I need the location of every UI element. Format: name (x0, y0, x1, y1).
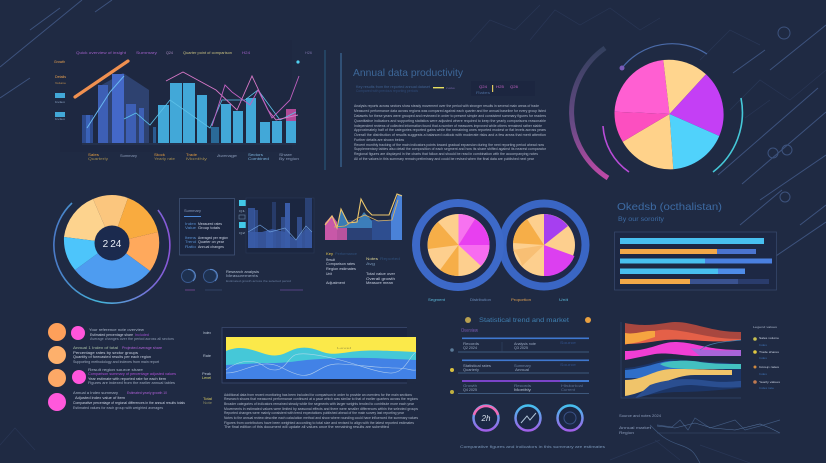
x-axis captions: Summary (120, 154, 138, 158)
x-axis captions: Monthly (186, 157, 208, 161)
panel: stacked area chart: Level (337, 346, 352, 350)
panel: mini blue bar chart: Q1 (239, 209, 245, 213)
list text: Year estimate with reported rate for each item (88, 377, 166, 381)
row text: Growth (463, 384, 477, 388)
list text: Estimated values for each group with weighted averages (73, 406, 163, 410)
right ring (502, 204, 586, 286)
row text (463, 341, 583, 392)
marker dot (296, 60, 300, 64)
paragraph text: Quantitative indicators and supporting statistics were adjusted where required to keep the yearly comparisons reasonable (354, 119, 546, 123)
paragraph text (224, 393, 418, 429)
paragraph text: The final edition of this document will update all values once the remaining results are submitted (224, 425, 389, 429)
x-axis captions: Sales (88, 153, 100, 157)
outer gradient arc (572, 48, 608, 178)
paragraph text: Notes to the annual review describe each calculation method and show where rounding could have influenced the summary values (224, 416, 418, 420)
pink tags: H25 (496, 85, 504, 89)
left legend: Volume (55, 81, 66, 85)
pie slices (614, 60, 670, 114)
flow legend: Trade shares (759, 350, 780, 354)
sub heading: note (446, 86, 456, 90)
pink tags: Q26 (510, 85, 518, 89)
panel: horizontal bars (614, 201, 776, 290)
twin pie captions: Proportion (511, 298, 531, 302)
chart heading labels: H24 (242, 51, 250, 55)
flow legend: Sales volume (759, 336, 779, 340)
left legend: Index (55, 117, 66, 121)
flow legend: Yearly values (759, 380, 781, 384)
list text (73, 328, 185, 410)
panel: mountain line chart (325, 194, 402, 285)
left legend: Details (55, 75, 66, 79)
flow legend: Group rates (759, 365, 780, 369)
row text: Historical (561, 384, 583, 388)
row text: Monthly (514, 388, 532, 392)
side labels: Total (203, 397, 212, 401)
list text: Result region source share (88, 368, 143, 372)
row text: Quarterly (463, 368, 479, 372)
paragraph text: Broader categories of indicators remained steady while the segments with larger weights tended to contribute more each year (224, 402, 415, 406)
chart line overlays (226, 352, 416, 375)
panel: progress list: Overview (461, 328, 478, 334)
flow legend: Legend values (753, 325, 778, 329)
bars: cyan group (158, 83, 296, 143)
panel: small legend box: Measured rates (198, 222, 222, 226)
donut slices (64, 199, 112, 243)
x-axis captions: Average (217, 154, 237, 158)
paragraph text: Measured performance data across regions was compared against each quarter and the annual baseline for every group listed (354, 109, 546, 113)
x-axis captions: Sectors (248, 153, 264, 157)
orange trend line (75, 61, 128, 97)
list text: Figures are indexed from the earlier annual tables (88, 381, 175, 385)
heading: Statistical trend and market (479, 317, 569, 324)
row text: Records (514, 384, 532, 388)
panel: horizontal bars: By our sorority (618, 216, 665, 223)
row text: Source (560, 363, 576, 367)
pink trend lines (166, 72, 298, 120)
sub heading: Key results from the reported annual dataset (356, 85, 430, 89)
heading: Okedsb (octhalistan) (617, 201, 722, 213)
paragraph text: All of the values in this summary remain preliminary and could be revised when the final data are published next year (354, 157, 535, 161)
paragraph text: Approximately half of the categories reported gains while the remaining ones reported modest or flat levels across years (354, 128, 546, 132)
row text: Current (561, 388, 575, 392)
twin pie captions: Unit (559, 298, 568, 302)
left legend: Growth (54, 60, 65, 64)
panel: flow chart (621, 322, 781, 398)
list text: Annual 1 Index of total (73, 346, 118, 350)
row text: Q4 2025 (463, 388, 477, 392)
side labels: Note (203, 401, 212, 405)
right axis (324, 50, 326, 170)
panel: dials and caption: Research analysis (226, 270, 259, 274)
paragraph text: Recent monthly tracking of the main indicators points toward gradual expansion during the next reporting period ahead now (354, 143, 544, 147)
left legend: Index (55, 100, 66, 104)
chart heading labels: Q24 (166, 51, 173, 55)
panel: bottom-right line chart: Source and notes 2024 (619, 414, 661, 418)
flow legend: Index (759, 343, 768, 347)
right pie (513, 214, 575, 276)
chart heading labels: Quick overview of insight (76, 51, 126, 55)
panel: small legend box (180, 198, 234, 255)
pink tags: Rates (476, 91, 490, 95)
side labels: Level (202, 376, 211, 380)
panel: top-centre text block (341, 53, 547, 167)
row text: Analysis note (514, 342, 536, 346)
panel: dials and caption (182, 269, 303, 290)
panel: twin pie charts (416, 203, 586, 302)
pink tags: Q24 (479, 85, 487, 89)
paragraph text: Figures from contributors have been weighted according to total size and revised to align with the latest reported estimates (224, 421, 414, 425)
list text: Quantity of forecasted results per each region (73, 355, 151, 359)
twin pie captions (428, 298, 568, 302)
left ring (416, 203, 500, 287)
list text: Included (135, 333, 149, 337)
mountain chart captions: Measure mean (366, 281, 393, 285)
row text: Source (560, 341, 576, 345)
mountain chart captions: Notes (366, 257, 379, 261)
side labels (202, 331, 212, 405)
paragraph text: Overall the distribution of results suggests a balanced outlook with moderate risks and a few areas that merit attention (354, 133, 546, 137)
x-axis captions: Yearly rate (154, 157, 175, 161)
paragraph text: Independent reviews of collected information found that a number of measures improved while others remained rather stable (354, 124, 542, 128)
list text: Projected average share (122, 346, 162, 350)
list text: Adjusted index value of item (75, 396, 125, 400)
mountain chart captions: Reported (380, 257, 400, 261)
x-axis captions: Trade (186, 153, 197, 157)
list text: Estimated yearly growth 10 (127, 391, 167, 395)
row text: Annual (515, 368, 529, 372)
top arc (622, 44, 707, 68)
caption: Comparative figures and indicators in this summary are estimates (460, 444, 605, 449)
mountain chart captions: Overall growth (366, 277, 395, 281)
flow legend (753, 325, 781, 390)
list text: Comparative percentage of regional differences in the annual results totals (73, 401, 185, 405)
heading: Annual data productivity (353, 67, 464, 79)
chart heading labels: H26 (305, 51, 312, 55)
mountain chart captions (326, 252, 400, 285)
mountain chart captions: Unit (326, 272, 332, 276)
bar rows (620, 238, 772, 284)
row text: Q3 2025 (514, 346, 528, 350)
paragraph text: Further details are shown below (354, 138, 404, 142)
light blue trend line (87, 76, 124, 128)
list text: Estimated percentage share (90, 333, 133, 337)
panel: small legend box: Ratio (185, 245, 196, 249)
flow legend: Index (759, 356, 768, 360)
mountain chart captions: Result (326, 258, 335, 262)
paragraph text: Supplementary tables also detail the composition of each segment and how its share shifted against its nearest comparator (354, 147, 547, 151)
panel: small legend box: Annual changes (198, 245, 224, 249)
list text: Average changes over the period across all sectors (90, 337, 174, 341)
mountain chart captions: Key (326, 252, 334, 256)
paragraph text: Research shows that measured performance continued at a pace which was similar to that of earlier quarters across the regions (224, 397, 418, 401)
panel: bottom-right line chart: Region (619, 431, 634, 435)
panel: small legend box: Quarter on year (198, 240, 225, 244)
mountain chart captions: Performance (335, 252, 357, 256)
mountain chart captions: Avg (366, 262, 375, 266)
paragraph text (354, 104, 547, 161)
paragraph text: Analysis reports across sectors show steady movement over the period with stronger results in several main areas of trade (354, 104, 539, 108)
panel: mini blue bar chart: Q2 (239, 231, 245, 235)
paragraph text: Additional data from recent monitoring has been included for comparison in order to provide an overview for the main sections (224, 393, 412, 397)
chart heading labels (76, 51, 312, 55)
list text: Percentage rates by sector groups (73, 351, 138, 355)
donut outer ring (54, 203, 170, 303)
list text: Supporting methodology and indexes from main report (73, 360, 159, 364)
bars: blue group (82, 73, 156, 143)
cyan arc (713, 98, 742, 172)
left legend (54, 60, 66, 121)
mountain chart captions: Total value over (366, 272, 396, 276)
row text: Records (463, 342, 480, 346)
panel: progress list (450, 317, 605, 449)
sub heading: Compared with previous reporting periods (356, 89, 418, 93)
row text: Q2 2024 (463, 346, 477, 350)
x-axis captions: Share (279, 153, 292, 157)
vertical rule (340, 53, 342, 167)
paragraph text: Regional figures are displayed in the charts that follow and should be read in combination with the accompanying notes (354, 152, 538, 156)
panel: small legend box: Group totals (198, 226, 220, 230)
panel: top-left bar chart (54, 40, 325, 170)
x-axis captions: Stock (154, 153, 166, 157)
progress rows (458, 338, 589, 394)
list text: Comparison summary of percentage adjusted values (88, 372, 176, 376)
panel: bottom-right line chart (619, 414, 780, 463)
x-axis captions: Combined (248, 157, 269, 161)
panel: small legend box: Averaged per region (198, 236, 228, 240)
panel: small legend box: Index (185, 222, 197, 226)
panel: small legend box: Summary (184, 209, 202, 213)
panel: stacked area chart (202, 328, 418, 429)
list text: Your reference note overview (89, 328, 144, 332)
panel: donut chart (54, 195, 170, 303)
panel: circle list (48, 323, 185, 411)
flow bands (625, 359, 741, 398)
list text: Annual a Index summary (73, 391, 118, 395)
donut centre value: 2 24 (103, 239, 122, 250)
chart heading labels: Quarter point of comparison (183, 51, 232, 55)
row text: Summary (514, 364, 532, 368)
row text: Statistical rates (463, 364, 492, 368)
panel: small legend box: Trend (185, 240, 196, 244)
x-axis captions: By region (279, 157, 299, 161)
flow legend: Index rate (759, 386, 774, 390)
chart heading labels: Summary (136, 51, 157, 55)
mountain chart captions: Region estimates (326, 267, 356, 271)
paragraph text: Movements in estimated values were limited by seasonal effects and there were smaller differences within the selected groups (224, 407, 418, 411)
panel: dials and caption: Estimated growth across the selected period (226, 279, 291, 283)
mountain chart captions: Adjustment (326, 281, 345, 285)
side labels: Rate (203, 354, 211, 358)
panel: small legend box: Items (185, 236, 197, 240)
left pie (428, 214, 490, 276)
panel: bottom-right line chart: Annual market (619, 426, 651, 430)
list circles (48, 323, 66, 341)
side labels: Peak (202, 372, 211, 376)
sub heading (356, 85, 456, 93)
side labels: Index (203, 331, 211, 335)
panel: dials and caption: Measurements (226, 274, 258, 278)
panel: small legend box: Value (185, 226, 196, 230)
purple arc (603, 126, 629, 172)
panel: mini blue bar chart (239, 198, 314, 253)
icons (465, 317, 471, 323)
x-axis captions (88, 153, 299, 161)
pink tags (471, 81, 535, 96)
twin pie captions: Distribution (470, 298, 491, 302)
mountain chart captions: Comparison rates (326, 262, 355, 266)
x-axis captions: Quarterly (88, 157, 109, 161)
ring gauges (474, 406, 582, 430)
panel: large pie chart (572, 44, 742, 178)
ring gauges: 2h (481, 414, 491, 423)
paragraph text: Reported changes were mainly consistent with trend expectations published ahead of the main survey last reporting year (224, 411, 405, 415)
paragraph text: Datasets for these years were grouped and reviewed in order to present simple and consistent summary figures for readers (354, 114, 546, 118)
row icons (450, 348, 454, 352)
flow legend: Index (759, 372, 768, 376)
twin pie captions: Segment (428, 298, 445, 302)
